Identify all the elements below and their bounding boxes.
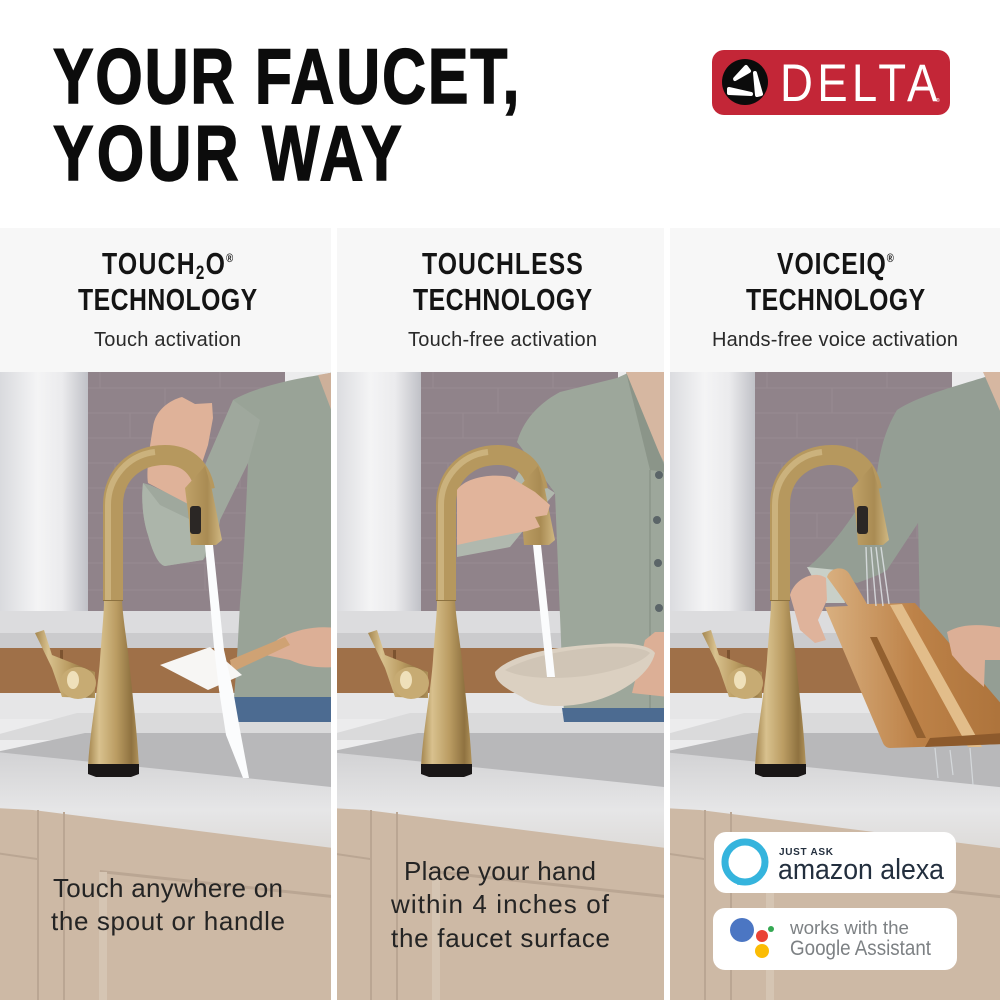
text: Touchless caption: within 4 inches of bbox=[390, 889, 610, 919]
text: Touchless caption: the faucet surface bbox=[391, 923, 610, 953]
text: Touch caption: the spout or handle bbox=[51, 906, 285, 936]
subheading: hands-free voice activation: Hands-free voice activation bbox=[712, 329, 958, 351]
cutting board bbox=[825, 568, 1000, 748]
panel: Touchless header bbox=[337, 228, 664, 372]
water spray bbox=[866, 547, 889, 606]
subheading: touch-free activation: Touch-free activation bbox=[408, 329, 597, 351]
text: Touch caption bbox=[51, 873, 285, 936]
badge: Google Assistant bbox=[713, 908, 957, 970]
icon: Google dots bbox=[730, 918, 774, 958]
Delta logo: ® bbox=[936, 97, 940, 104]
text: Touch caption: Touch anywhere on bbox=[53, 873, 283, 903]
right hand bbox=[947, 625, 1000, 687]
icon: sensor bbox=[190, 506, 201, 534]
panel: Voice photo bbox=[663, 372, 1000, 1000]
badge: Google Assistant: Google Assistant bbox=[790, 937, 931, 960]
badge: Amazon Alexa: JUST ASK bbox=[779, 847, 834, 858]
heading: VoiceIQ technology: VOICEIQ bbox=[777, 246, 886, 281]
badge: Amazon Alexa: amazon alexa bbox=[778, 854, 945, 886]
title: YOUR FAUCET, bbox=[53, 33, 519, 120]
icon: Alexa ring bbox=[725, 842, 765, 885]
heading: Touchless technology: TOUCHLESS bbox=[422, 246, 583, 281]
left hand bbox=[790, 575, 827, 643]
heading: Touch2O technology bbox=[78, 246, 257, 317]
bowl bbox=[495, 643, 655, 706]
heading: VoiceIQ technology: TECHNOLOGY bbox=[746, 282, 925, 317]
heading: Touch2O technology: ® bbox=[226, 252, 233, 265]
heading: VoiceIQ technology: ® bbox=[887, 252, 894, 265]
subheading: touch activation: Touch activation bbox=[94, 329, 241, 351]
panel: Touch photo bbox=[0, 372, 341, 1000]
heading: VoiceIQ technology bbox=[746, 246, 925, 317]
title bbox=[53, 33, 519, 197]
title: YOUR WAY bbox=[53, 110, 402, 197]
heading: Touch2O technology: TOUCH bbox=[102, 246, 195, 281]
hand over spout bbox=[457, 476, 550, 545]
text: Touchless caption bbox=[390, 856, 610, 953]
water stream bbox=[205, 545, 249, 778]
heading: Touch2O technology: TECHNOLOGY bbox=[78, 282, 257, 317]
person bbox=[142, 372, 335, 722]
water stream bbox=[533, 545, 555, 677]
Delta logo: DELTA bbox=[780, 54, 937, 113]
panel: Touchless photo bbox=[329, 372, 674, 1000]
badge: Google Assistant: works with the bbox=[789, 918, 909, 938]
text: Touchless caption: Place your hand bbox=[404, 856, 596, 886]
heading: Touch2O technology: 2 bbox=[196, 261, 204, 283]
Delta logo bbox=[712, 50, 950, 115]
person bbox=[457, 372, 668, 722]
icon: sensor bbox=[857, 506, 868, 534]
panel: Touch2O header bbox=[0, 228, 331, 372]
water drips bbox=[935, 748, 973, 785]
spatula bbox=[160, 637, 290, 690]
heading: Touchless technology: TECHNOLOGY bbox=[413, 282, 592, 317]
badge: Amazon Alexa bbox=[714, 832, 956, 893]
person bbox=[807, 372, 1000, 720]
panel: VoiceIQ header bbox=[670, 228, 1000, 372]
heading: Touchless technology bbox=[413, 246, 592, 317]
heading: Touch2O technology: O bbox=[206, 246, 225, 281]
